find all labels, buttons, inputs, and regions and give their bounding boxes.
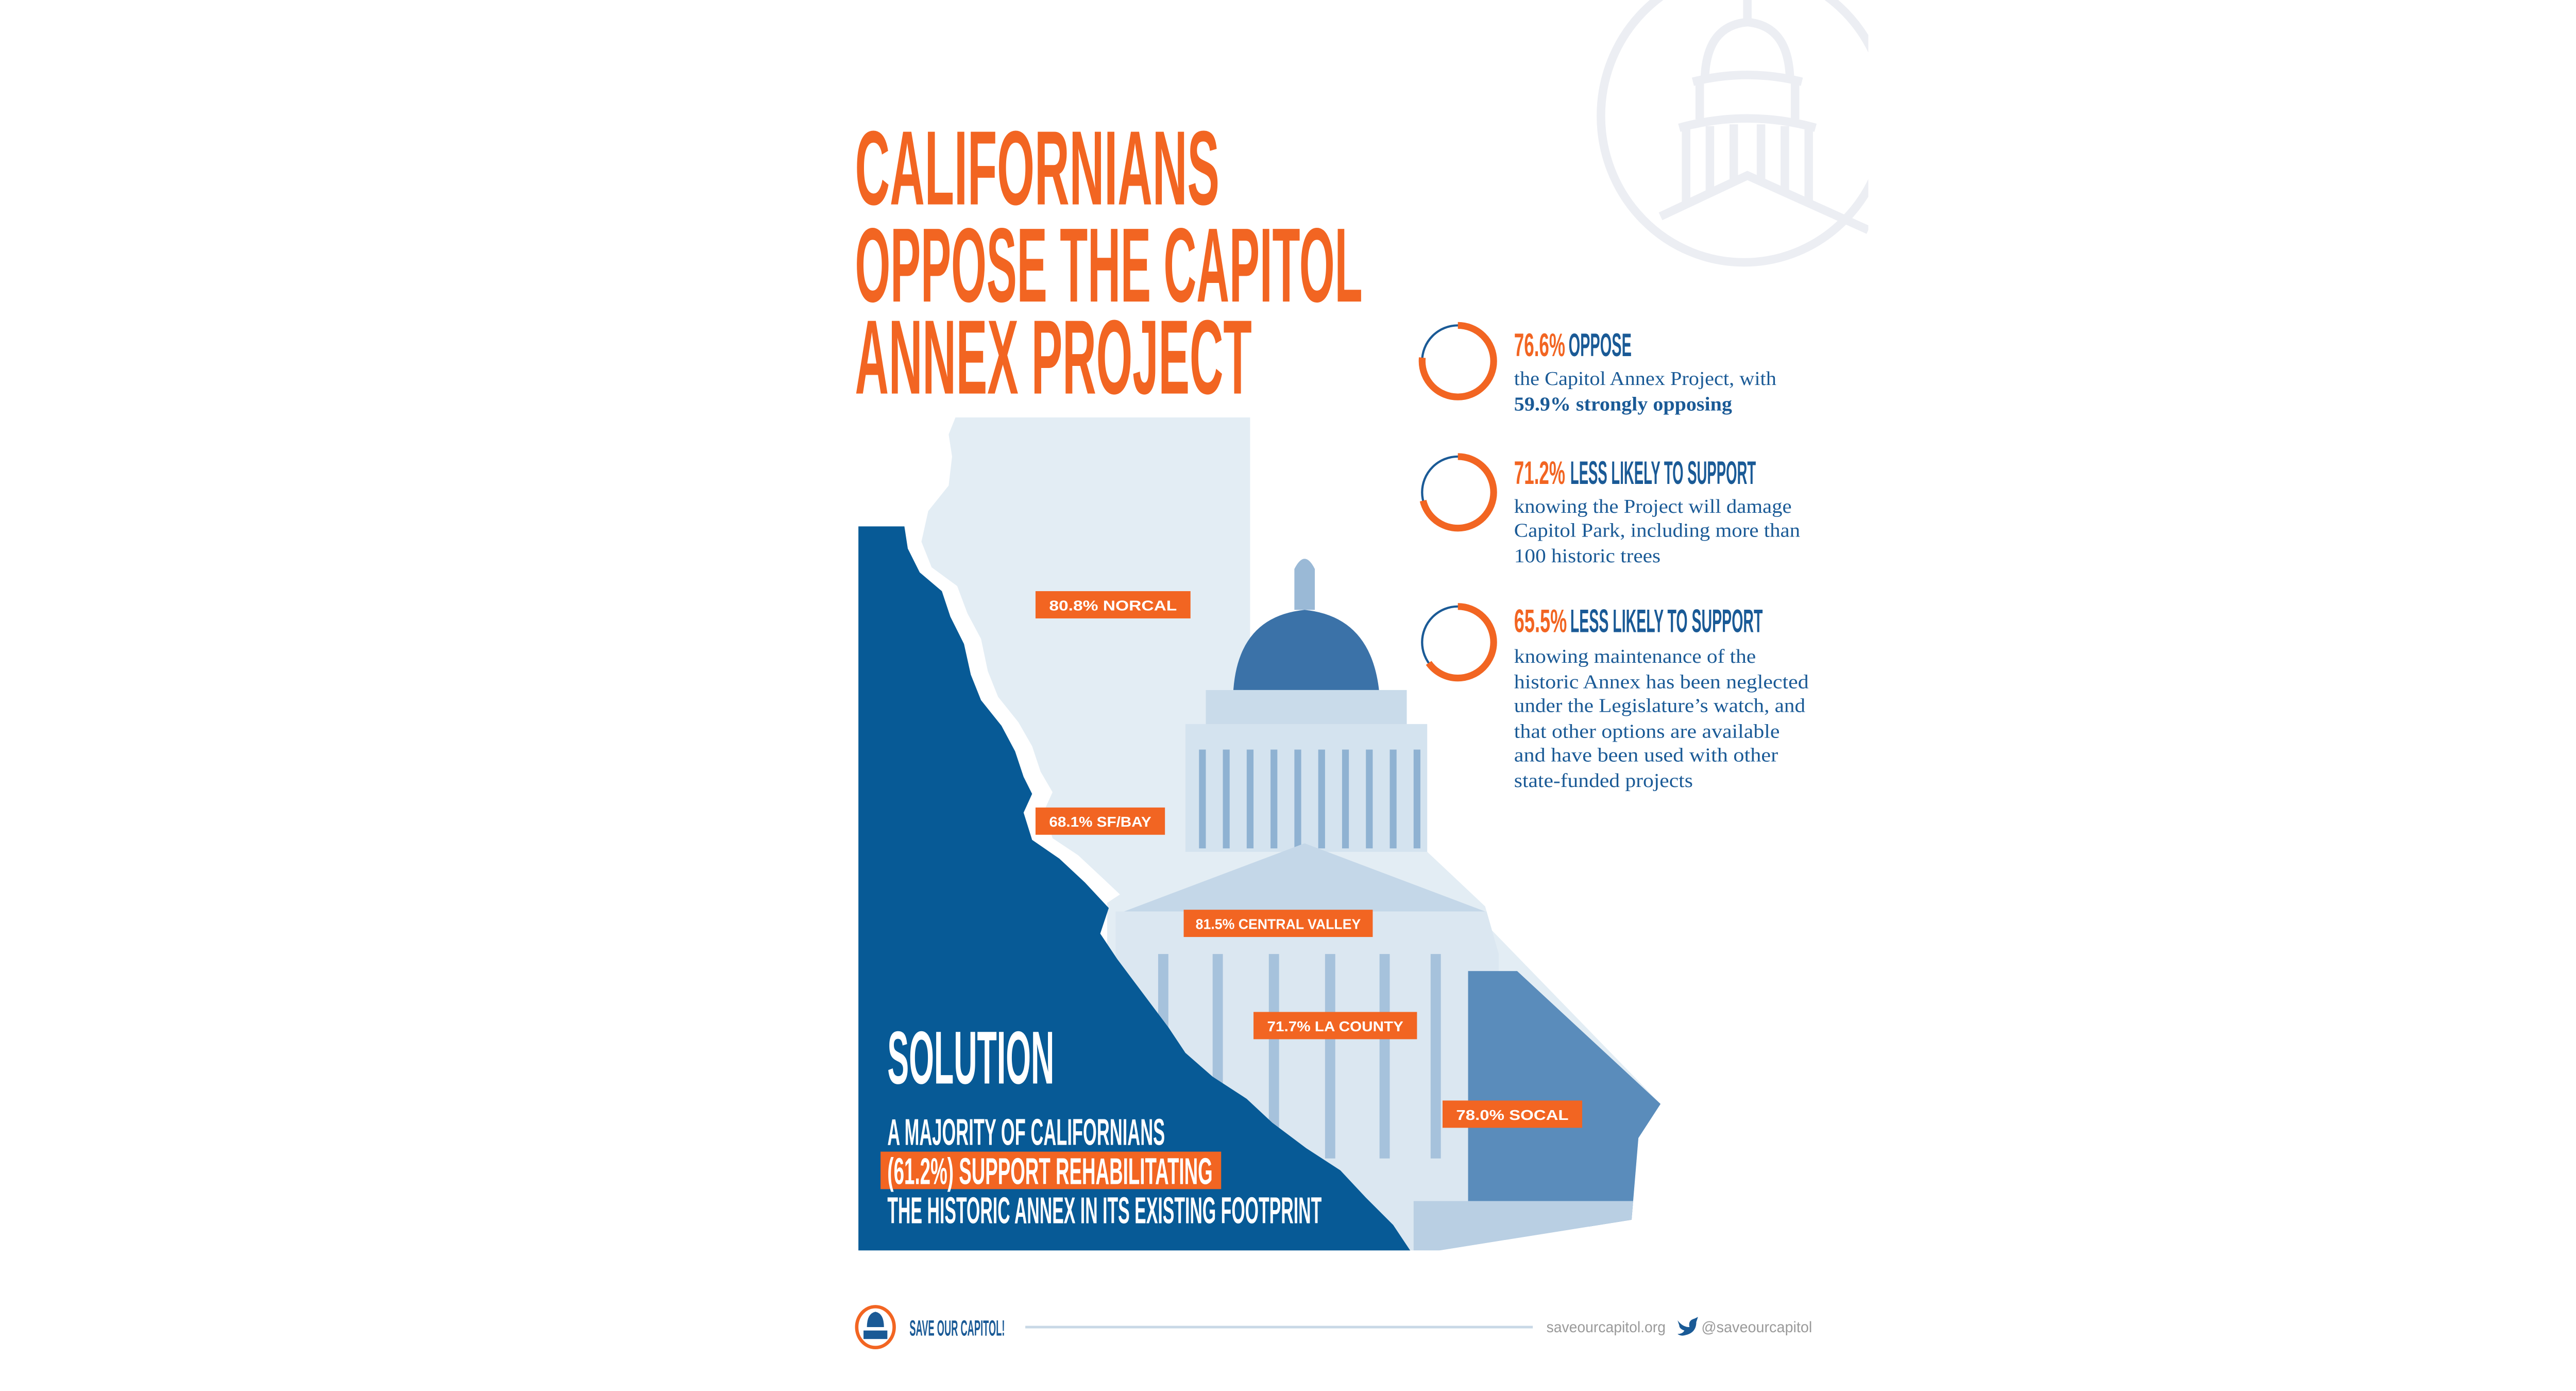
stat: 71.2% less likely: Capitol Park, including more than bbox=[1514, 519, 1800, 541]
map: dark blue region bbox=[858, 526, 1410, 1250]
stat: 65.5% less likely: and have been used with other bbox=[1514, 745, 1778, 766]
labels: regions: 80.8% NORCAL bbox=[1049, 597, 1177, 613]
stat: 65.5% less likely bbox=[1422, 603, 1809, 792]
footer: @saveourcapitol bbox=[1701, 1319, 1812, 1336]
text: OPPOSE THE CAPITOL bbox=[855, 206, 1363, 324]
title: CALIFORNIANS bbox=[855, 109, 1219, 227]
stat: 71.2% less likely: 71.2% bbox=[1514, 455, 1565, 491]
stat: 65.5% less likely: 65.5% bbox=[1514, 603, 1567, 639]
stat: 71.2% less likely: 100 historic trees bbox=[1514, 545, 1660, 567]
stat: 65.5% less likely: that other options are available bbox=[1514, 720, 1780, 742]
stat: 65.5% less likely: under the Legislature’s watch, and bbox=[1514, 695, 1805, 717]
watermark: capitol logo bbox=[1601, 0, 1887, 262]
stat: 71.2% less likely bbox=[1422, 455, 1800, 567]
capitol building approximation bbox=[1107, 681, 1669, 1261]
solution text: A MAJORITY OF CALIFORNIANS bbox=[887, 1111, 1165, 1153]
labels: regions: 81.5% CENTRAL VALLEY bbox=[1196, 916, 1361, 932]
stat: 65.5% less likely: knowing maintenance of the bbox=[1514, 646, 1756, 667]
solution text bbox=[880, 1015, 1321, 1231]
text: THE HISTORIC ANNEX IN ITS EXISTING FOOTPRINT bbox=[887, 1189, 1321, 1231]
stat: 71.2% less likely: LESS LIKELY TO SUPPORT bbox=[1570, 455, 1756, 491]
stat: 76.6% oppose: 76.6% bbox=[1514, 327, 1565, 363]
stat: 76.6% oppose: 59.9% strongly opposing bbox=[1514, 394, 1732, 415]
title bbox=[855, 109, 1363, 416]
stat: 71.2% less likely: knowing the Project will damage bbox=[1514, 496, 1792, 517]
labels: regions bbox=[1036, 591, 1582, 1128]
footer bbox=[857, 1306, 1812, 1348]
icon: logo bbox=[857, 1306, 894, 1348]
stat: 65.5% less likely: historic Annex has been neglected bbox=[1514, 671, 1809, 693]
labels: regions: 68.1% SF/BAY bbox=[1049, 814, 1151, 830]
footer: saveourcapitol.org bbox=[1547, 1319, 1666, 1336]
title: ANNEX PROJECT bbox=[855, 298, 1252, 416]
footer: SAVE OUR CAPITOL! bbox=[909, 1316, 1005, 1341]
capitol dome and lantern bbox=[1233, 559, 1380, 695]
labels: regions: 78.0% SOCAL bbox=[1456, 1107, 1569, 1123]
solution text: SOLUTION bbox=[887, 1015, 1054, 1099]
icon: twitter bbox=[1677, 1317, 1698, 1336]
map: california with capitol bbox=[858, 409, 1669, 1261]
stat: 76.6% oppose: OPPOSE bbox=[1569, 327, 1632, 363]
stat: 65.5% less likely: LESS LIKELY TO SUPPORT bbox=[1570, 603, 1762, 639]
stat: 65.5% less likely: state-funded projects bbox=[1514, 770, 1693, 792]
stat: 76.6% oppose: the Capitol Annex Project, with bbox=[1514, 368, 1776, 390]
solution text: (61.2%) SUPPORT REHABILITATING bbox=[887, 1150, 1213, 1192]
labels: regions: 71.7% LA COUNTY bbox=[1267, 1018, 1403, 1034]
stat: 76.6% oppose bbox=[1422, 325, 1776, 415]
map: light region bbox=[921, 417, 1660, 1103]
